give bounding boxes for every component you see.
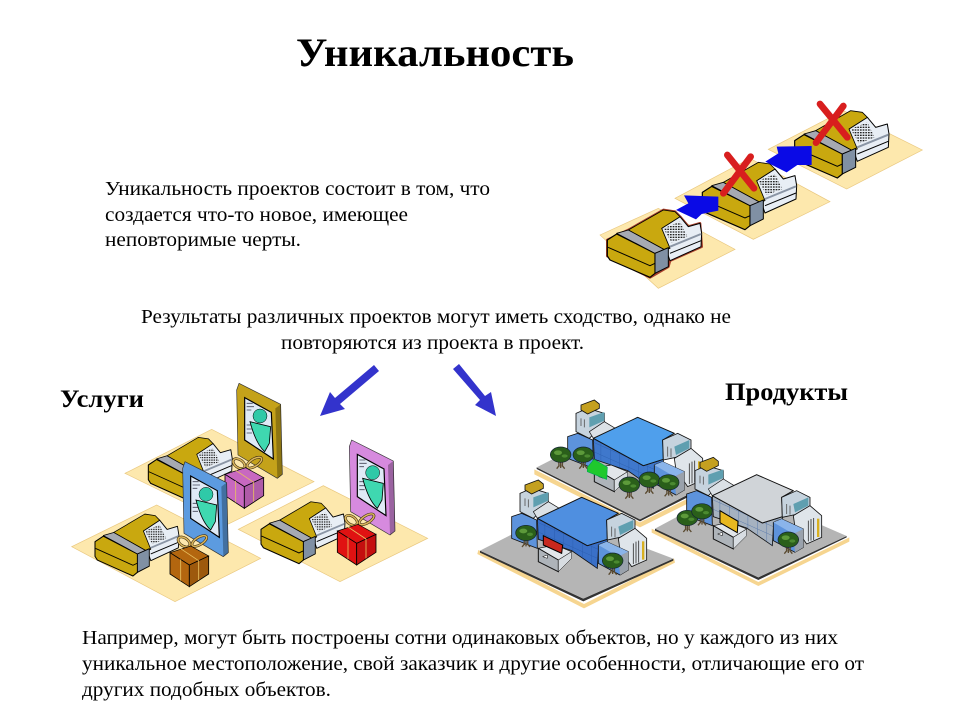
second document (702, 162, 797, 230)
icon: chain of crossed-out documents (600, 104, 922, 288)
cross on third document (816, 104, 847, 143)
first document (607, 210, 702, 277)
front building plate (477, 513, 675, 608)
gold card (237, 383, 282, 478)
right service binder (261, 502, 345, 564)
arrow: to products (453, 364, 496, 416)
text block: results may be similar: Результаты различных проектов могут иметь сходство, однако не (141, 306, 731, 328)
front building sign (543, 536, 563, 553)
arrow: to services (320, 365, 379, 416)
right service pad (238, 486, 428, 582)
text block: example: уникальное местоположение, свой заказчик и другие особенности, отличающие его от (82, 653, 864, 675)
arrow: first to second (676, 195, 718, 219)
third document pad (768, 111, 922, 189)
text block: example (82, 627, 864, 701)
text block: example: других подобных объектов. (82, 679, 331, 701)
red gift (337, 512, 376, 565)
back service pad (125, 429, 314, 524)
third document (795, 111, 889, 178)
back building trees (550, 447, 679, 499)
front building trees (516, 525, 623, 575)
illustration: products (477, 400, 849, 608)
left service pad (72, 505, 261, 602)
right building plate (652, 487, 849, 586)
cross on second document (723, 155, 754, 193)
back building plate (534, 430, 705, 527)
text block: uniqueness definition: создается что-то новое, имеющее (105, 204, 408, 226)
text block: uniqueness definition (105, 178, 490, 251)
pink gift (225, 455, 264, 508)
text block: uniqueness definition: неповторимые черты. (105, 229, 301, 251)
text block: example: Например, могут быть построены сотни одинаковых объектов, но у каждого из них (82, 627, 838, 649)
back building (568, 400, 703, 495)
title: Уникальность (296, 30, 574, 75)
text block: results may be similar: повторяются из проекта в проект. (281, 332, 584, 354)
right building (687, 457, 822, 552)
right building trees (677, 504, 799, 554)
back building sign (587, 459, 607, 479)
pink card (349, 440, 395, 535)
blue card (183, 462, 228, 557)
left service binder (95, 514, 179, 576)
text block: results may be similar (141, 306, 731, 354)
heading: services: Услуги (60, 386, 144, 413)
second document pad (675, 158, 830, 239)
front building (512, 480, 647, 575)
illustration: services (72, 383, 428, 602)
brown gift (170, 533, 209, 587)
arrow: second to third (765, 146, 812, 172)
right building sign (720, 511, 738, 533)
first document selection outline (607, 210, 702, 277)
text block: uniqueness definition: Уникальность проектов состоит в том, что (105, 178, 490, 200)
heading: products: Продукты (725, 379, 848, 406)
back service binder (148, 437, 232, 499)
first document pad (600, 208, 735, 288)
